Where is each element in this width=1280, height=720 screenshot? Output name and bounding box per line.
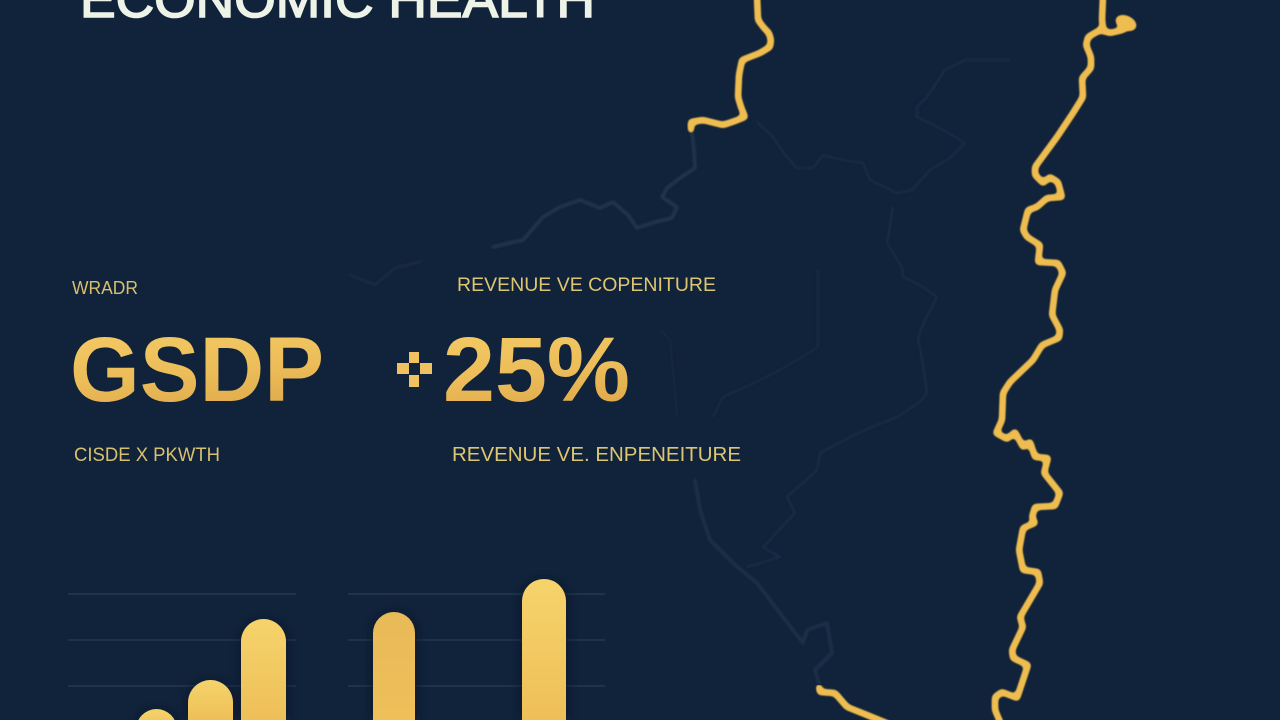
label: top left: WRADR: [72, 278, 138, 298]
map: gold border segment, bottom: [819, 687, 889, 720]
icon: plus sign: [397, 352, 432, 387]
map: gold border segment, top: [691, 0, 771, 130]
bar 1: [136, 709, 177, 720]
bar 5: [522, 579, 566, 720]
metric: 25 percent: 25%: [443, 319, 630, 421]
label: top right: REVENUE VE COPENITURE: [457, 275, 716, 296]
bar 3: [241, 619, 286, 720]
map: gold blob at northern tip: [1113, 12, 1139, 34]
map: gold border, right side: [995, 0, 1139, 720]
bar chart: right: [348, 579, 605, 720]
label: bottom left: CISDE X PKWTH: [74, 445, 220, 466]
label: bottom right: REVENUE VE. ENPENEITURE: [452, 444, 741, 466]
metric: GSDP: GSDP: [70, 319, 324, 421]
bar 4: [373, 612, 415, 720]
map: faint internal boundaries: [350, 60, 1010, 683]
bar chart: left: [68, 594, 296, 720]
bar 2: [188, 680, 233, 720]
